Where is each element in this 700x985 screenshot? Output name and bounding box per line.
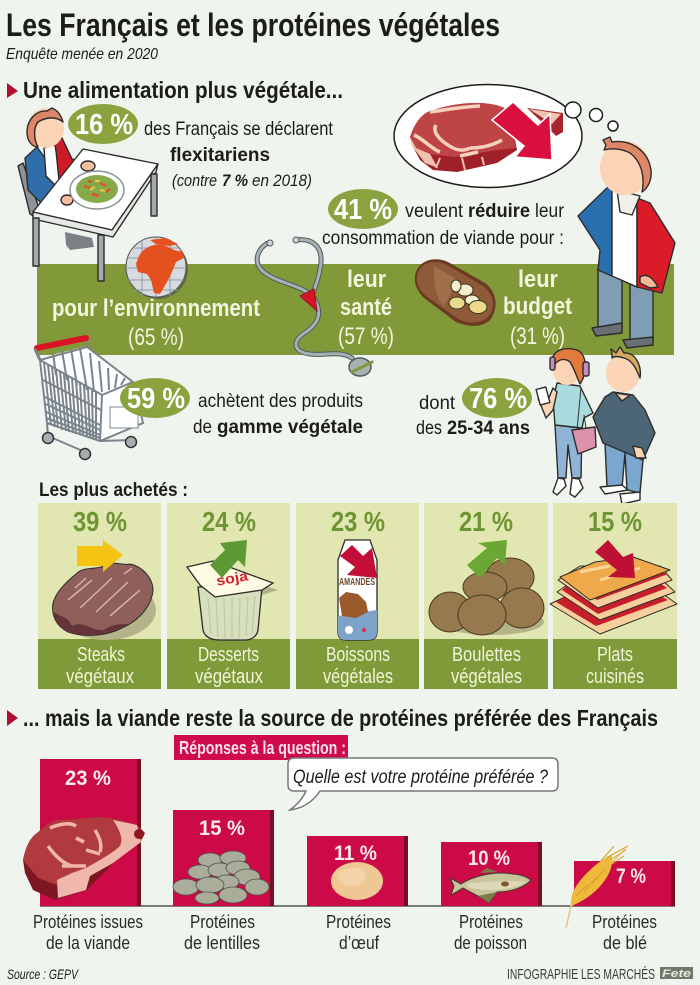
icon: wallet with coins xyxy=(415,259,496,326)
label: protéines d'oeuf xyxy=(326,911,391,953)
icon: green rising arrow xyxy=(467,540,507,578)
card: boissons végétales: 23 % xyxy=(331,506,385,537)
card: steaks végétaux: végétaux xyxy=(66,666,134,688)
bar: oeuf 11 % xyxy=(307,836,408,906)
card: boulettes végétales xyxy=(424,503,548,689)
bar: poisson 10 % xyxy=(441,842,542,906)
callout: 76 % des 25-34 ans xyxy=(416,378,532,439)
bar: lentilles 15 % xyxy=(173,810,274,906)
label: protéines de lentilles: Protéines xyxy=(190,911,255,932)
icon: green rising arrow xyxy=(210,540,247,578)
callout: 59 % gamme végétale: de xyxy=(193,417,212,438)
card: boissons végétales: végétales xyxy=(323,666,393,688)
card: steaks végétaux xyxy=(38,503,161,689)
label: environnement: pour l’environnement xyxy=(52,295,260,322)
panel: reasons band xyxy=(37,264,674,355)
icon: dessert cup: soja xyxy=(215,567,249,589)
speech bubble: question: Quelle est votre protéine préférée ? xyxy=(293,767,548,788)
bar: blé 7 % xyxy=(566,846,675,928)
subtitle: Enquête menée en 2020 xyxy=(6,46,158,63)
icon: yellow stable arrow xyxy=(77,540,123,572)
bar: blé 7 %: 7 % xyxy=(616,865,646,888)
callout: 41 % réduire viande: leur xyxy=(535,201,565,222)
icon: globe xyxy=(126,237,188,299)
label: budget: leur xyxy=(518,266,558,293)
card: boulettes végétales: Boulettes xyxy=(452,644,521,666)
callout: 41 % réduire viande: 41 % xyxy=(334,194,392,226)
label: santé: leur xyxy=(347,266,386,293)
card: steaks végétaux: 39 % xyxy=(73,506,127,537)
callout: 16 % flexitariens: 7 % xyxy=(222,171,248,190)
label: santé: santé xyxy=(340,294,392,321)
callout: 59 % gamme végétale: achètent des produits xyxy=(198,391,363,412)
callout: 16 % flexitariens: en 2018) xyxy=(252,171,312,190)
card: plats cuisinés: 15 % xyxy=(588,506,642,537)
card: desserts végétaux: végétaux xyxy=(195,666,263,688)
card: boissons végétales xyxy=(296,503,419,689)
label: protéines de poisson xyxy=(454,911,527,953)
icon: almond milk carton: AMANDES xyxy=(339,577,375,588)
callout: 16 % flexitariens: (contre xyxy=(172,171,217,190)
callout: 76 % des 25-34 ans: 76 % xyxy=(469,383,527,415)
card: plats cuisinés: Plats xyxy=(597,644,633,666)
icon: person eating at table xyxy=(18,108,158,281)
label: protéines issues de la viande xyxy=(33,911,143,953)
icon: lasagna xyxy=(550,557,677,634)
label: réponses à la question: Réponses à la question : xyxy=(179,738,346,758)
label: budget xyxy=(503,266,572,350)
label: protéines de blé xyxy=(592,911,657,953)
callout: 41 % réduire viande: consommation de viande pour : xyxy=(322,228,564,249)
woman xyxy=(536,349,596,497)
title: Les Français et les protéines végétales xyxy=(6,7,500,43)
label: santé xyxy=(338,266,394,350)
label: protéines de blé: de blé xyxy=(603,932,647,953)
card: steaks végétaux: Steaks xyxy=(77,644,125,666)
bar chart: protéine préférée xyxy=(23,759,675,928)
bar: poisson 10 %: 10 % xyxy=(468,847,510,870)
icon: red falling arrow xyxy=(595,540,635,578)
card: desserts végétaux xyxy=(167,503,290,689)
icon: plant balls xyxy=(429,558,544,635)
heading: les plus achetés: Les plus achetés : xyxy=(39,480,188,501)
icon: veggie steak xyxy=(53,563,156,640)
card: boulettes végétales: végétales xyxy=(451,666,522,688)
card: boissons végétales: Boissons xyxy=(326,644,390,666)
bar: viande 23 % xyxy=(23,759,145,906)
callout: 59 % gamme végétale: gamme végétale xyxy=(217,417,363,438)
card: desserts végétaux: Desserts xyxy=(198,644,259,666)
callout: 76 % des 25-34 ans: des xyxy=(416,418,442,439)
icon: red falling arrow xyxy=(340,545,377,578)
card: plats cuisinés xyxy=(550,503,677,689)
label: protéines issues de la viande: de la viande xyxy=(46,932,130,953)
icon: young couple xyxy=(536,347,655,504)
credit: Fete xyxy=(662,968,691,980)
icon: almond milk carton xyxy=(338,540,377,640)
man xyxy=(593,347,655,504)
callout: 59 % gamme végétale: 59 % xyxy=(127,383,185,415)
label: protéines issues de la viande: Protéines issues xyxy=(33,911,143,932)
label: budget: (31 %) xyxy=(510,323,565,350)
callout: 41 % réduire viande: veulent xyxy=(405,201,464,222)
callout: 59 % gamme végétale xyxy=(120,378,363,438)
label: protéines de poisson: Protéines xyxy=(459,911,523,932)
icon: thought bubble with steak and down arrow xyxy=(394,84,618,188)
label: environnement: (65 %) xyxy=(128,324,184,351)
icon: dessert cup xyxy=(187,561,278,640)
label: protéines de poisson: de poisson xyxy=(454,932,527,953)
label: budget: budget xyxy=(503,293,572,320)
label: protéines de lentilles: de lentilles xyxy=(184,932,260,953)
icon: shopping cart xyxy=(35,338,143,460)
source: Source : GEPV xyxy=(7,966,79,982)
label: protéines de lentilles xyxy=(184,911,260,953)
bar: oeuf 11 %: 11 % xyxy=(334,842,377,865)
callout: 41 % réduire viande xyxy=(322,189,565,249)
callout: 16 % flexitariens: des Français se déclarent xyxy=(144,119,334,140)
callout: 41 % réduire viande: réduire xyxy=(468,201,530,222)
callout: 16 % flexitariens: flexitariens xyxy=(170,145,270,166)
section heading: une alimentation plus végétale: Une alimentation plus végétale... xyxy=(23,77,343,103)
speech bubble: question xyxy=(288,758,558,810)
card: plats cuisinés: cuisinés xyxy=(586,666,644,688)
label: réponses à la question xyxy=(174,735,348,760)
bar: viande 23 %: 23 % xyxy=(65,767,111,790)
bar: lentilles 15 %: 15 % xyxy=(199,817,245,840)
label: santé: (57 %) xyxy=(338,323,394,350)
label: environnement xyxy=(52,295,260,351)
callout: 16 % flexitariens xyxy=(68,104,334,190)
callout: 76 % des 25-34 ans: dont xyxy=(419,393,456,414)
label: protéines de blé: Protéines xyxy=(592,911,657,932)
card: boulettes végétales: 21 % xyxy=(459,506,513,537)
card: desserts végétaux: 24 % xyxy=(202,506,256,537)
callout: 16 % flexitariens: 16 % xyxy=(75,109,133,141)
label: protéines d'oeuf: d’œuf xyxy=(339,932,380,953)
label: protéines d'oeuf: Protéines xyxy=(326,911,391,932)
callout: 76 % des 25-34 ans: 25-34 ans xyxy=(447,418,530,439)
icon: man in French flag jacket xyxy=(578,137,675,348)
icon: stethoscope xyxy=(257,237,372,376)
